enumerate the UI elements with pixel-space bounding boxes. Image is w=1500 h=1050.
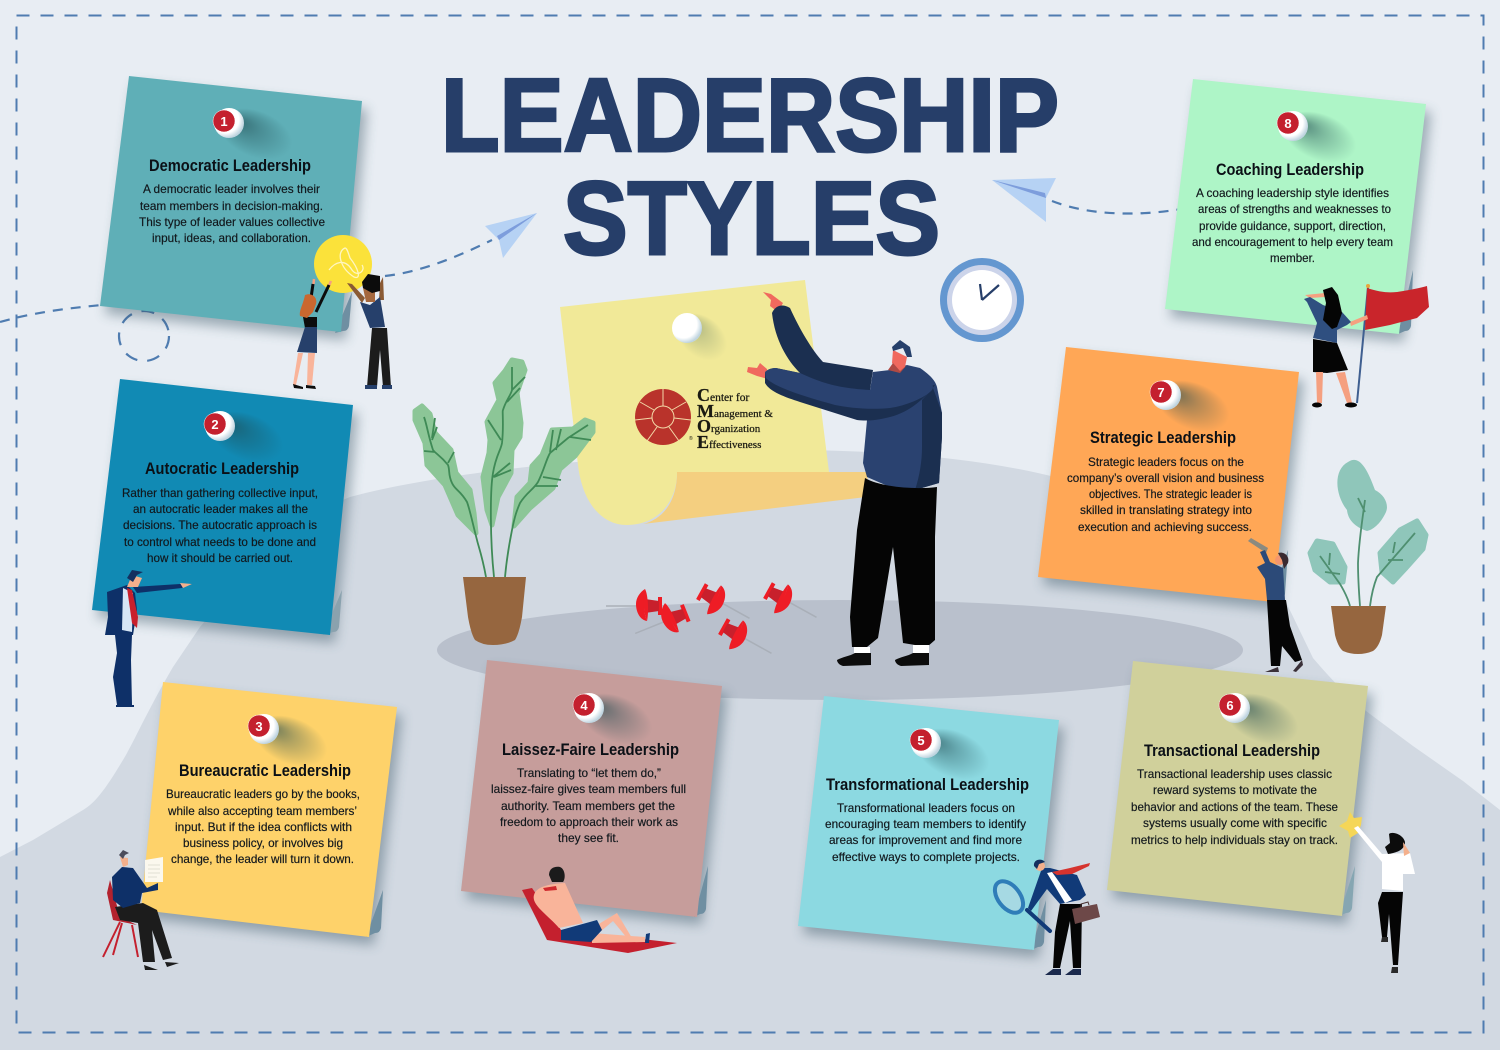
body text: and encouragement to help every team <box>1192 235 1393 249</box>
heading: Democratic Leadership <box>149 157 311 175</box>
pin 3: 3 <box>255 719 263 734</box>
logo: CMOE: ® <box>689 435 693 442</box>
panel: 8 coaching leadership <box>1165 79 1431 342</box>
figure: pointing businessman <box>105 570 192 707</box>
hands <box>747 292 783 379</box>
pin 5 <box>909 718 997 790</box>
icon: magnifier <box>989 876 1050 931</box>
figure: man with magnifier <box>989 860 1100 975</box>
body text: input. But if the idea conflicts with <box>175 820 352 834</box>
body text: behavior and actions of the team. These <box>1131 800 1338 814</box>
panel: 3 bureaucratic leadership <box>141 682 402 945</box>
heading: Transformational Leadership <box>826 776 1029 794</box>
icon: star <box>1339 812 1362 838</box>
body text: areas of strengths and weaknesses to <box>1198 202 1391 216</box>
heading: Bureaucratic Leadership <box>179 762 351 780</box>
pin 5: 5 <box>917 733 925 748</box>
pin 2 <box>203 401 291 473</box>
body text: objectives. The strategic leader is <box>1089 487 1252 501</box>
body text: to control what needs to be done and <box>124 535 316 549</box>
logo: CMOE: Organization <box>697 416 761 436</box>
body text: change, the leader will turn it down. <box>171 852 354 866</box>
panel: 5 transformational leadership <box>798 696 1064 958</box>
body text: encouraging team members to identify <box>825 817 1026 831</box>
pin 8: 8 <box>1284 116 1292 131</box>
briefcase <box>1072 902 1100 924</box>
body text: execution and achieving success. <box>1078 520 1252 534</box>
icon: left plant <box>415 360 593 645</box>
panel: 6 transactional leadership <box>1107 661 1373 924</box>
back arm <box>772 306 873 390</box>
logo: CMOE <box>635 385 773 452</box>
socks and shoes <box>854 645 929 653</box>
background hill <box>0 450 1500 1050</box>
icon: paper plane left <box>485 213 537 258</box>
figure: man holding star <box>1339 812 1415 973</box>
figure: woman lifting bulb <box>293 235 372 389</box>
body text: input, ideas, and collaboration. <box>152 231 311 245</box>
pin 3 <box>247 705 335 777</box>
logo: CMOE: Effectiveness <box>697 432 761 452</box>
body text: how it should be carried out. <box>147 551 293 565</box>
body text: while also accepting team members’ <box>167 804 357 818</box>
title: LEADERSHIP <box>441 58 1059 174</box>
clipboard <box>145 857 163 882</box>
heading: Strategic Leadership <box>1090 429 1236 447</box>
heading: Autocratic Leadership <box>145 460 299 478</box>
front arm <box>765 368 935 421</box>
logo: CMOE: Management & <box>697 401 773 421</box>
body text <box>1067 455 1264 534</box>
body text: laissez-faire gives team members full <box>491 782 686 796</box>
panel: center paper <box>560 280 868 525</box>
body text: Rather than gathering collective input, <box>122 486 318 500</box>
body text: Transformational leaders focus on <box>837 801 1015 815</box>
body text <box>139 182 325 245</box>
body text: company’s overall vision and business <box>1067 471 1264 485</box>
body text: skilled in translating strategy into <box>1080 503 1252 517</box>
torso <box>863 365 942 490</box>
body text: effective ways to complete projects. <box>832 850 1020 864</box>
body text: an autocratic leader makes all the <box>133 502 308 516</box>
panel: 4 laissez-faire leadership <box>461 660 727 925</box>
body text <box>166 787 360 866</box>
body text: member. <box>1270 251 1315 265</box>
panel: 1 democratic leadership <box>100 76 367 340</box>
heading: Transactional Leadership <box>1144 742 1320 760</box>
pin 4: 4 <box>580 698 588 713</box>
pin 4 <box>572 683 660 755</box>
logo: CMOE: Center for <box>697 385 749 405</box>
heading: Coaching Leadership <box>1216 161 1364 179</box>
icon: clock <box>940 258 1024 342</box>
body text: Bureaucratic leaders go by the books, <box>166 787 360 801</box>
title <box>441 58 1059 277</box>
body text <box>122 486 318 565</box>
pin 8 <box>1276 101 1364 173</box>
body text: provide guidance, support, direction, <box>1199 219 1386 233</box>
figure: sunbather on towel <box>522 867 677 953</box>
pin 2: 2 <box>211 417 219 432</box>
dashed circle <box>119 311 169 361</box>
icon: right plant <box>1310 460 1426 654</box>
dashed path: left to paper plane <box>0 240 492 322</box>
body text: systems usually come with specific <box>1143 816 1327 830</box>
body text: authority. Team members get the <box>501 799 675 813</box>
pin 7 <box>1149 370 1237 442</box>
body text <box>825 801 1026 864</box>
panel: 2 autocratic leadership <box>92 379 358 643</box>
icon: paper plane right <box>992 178 1056 222</box>
icon: light bulb <box>314 235 372 293</box>
body text: reward systems to motivate the <box>1153 783 1317 797</box>
body text: areas for improvement and find more <box>829 833 1022 847</box>
body text: freedom to approach their work as <box>500 815 678 829</box>
body text: A democratic leader involves their <box>143 182 320 196</box>
body text <box>1131 767 1338 847</box>
body text: they see fit. <box>558 831 619 845</box>
pin 1: 1 <box>220 114 228 129</box>
body text: decisions. The autocratic approach is <box>123 518 317 532</box>
pin: center <box>668 304 736 370</box>
body text: Translating to “let them do,” <box>517 766 661 780</box>
figure: man lifting bulb <box>347 274 392 389</box>
figure: man with telescope <box>1248 538 1303 672</box>
body text: Transactional leadership uses classic <box>1137 767 1332 781</box>
figure: seated man with clipboard <box>103 850 179 970</box>
trousers <box>850 478 937 647</box>
dashed path: right plane <box>1052 201 1182 214</box>
head <box>892 350 907 372</box>
pushpins on floor <box>606 577 824 668</box>
pin 7: 7 <box>1157 385 1165 400</box>
body text <box>491 766 686 845</box>
main figure: presenter <box>747 292 942 666</box>
pin 6 <box>1218 683 1306 755</box>
pin 1 <box>212 98 300 170</box>
body text: This type of leader values collective <box>139 215 325 229</box>
body text: team members in decision-making. <box>140 199 323 213</box>
ground ellipse <box>437 600 1243 700</box>
body text: Strategic leaders focus on the <box>1088 455 1244 469</box>
title: STYLES <box>563 161 940 277</box>
panel: 7 strategic leadership <box>1038 347 1304 610</box>
body text <box>1192 186 1393 265</box>
body text: metrics to help individuals stay on track. <box>1131 833 1338 847</box>
pin 6: 6 <box>1226 698 1234 713</box>
body text: A coaching leadership style identifies <box>1196 186 1389 200</box>
body text: business policy, or involves big <box>183 836 343 850</box>
heading: Laissez-Faire Leadership <box>502 741 679 759</box>
figure: woman with flag <box>1304 284 1429 408</box>
flag <box>1357 284 1429 403</box>
